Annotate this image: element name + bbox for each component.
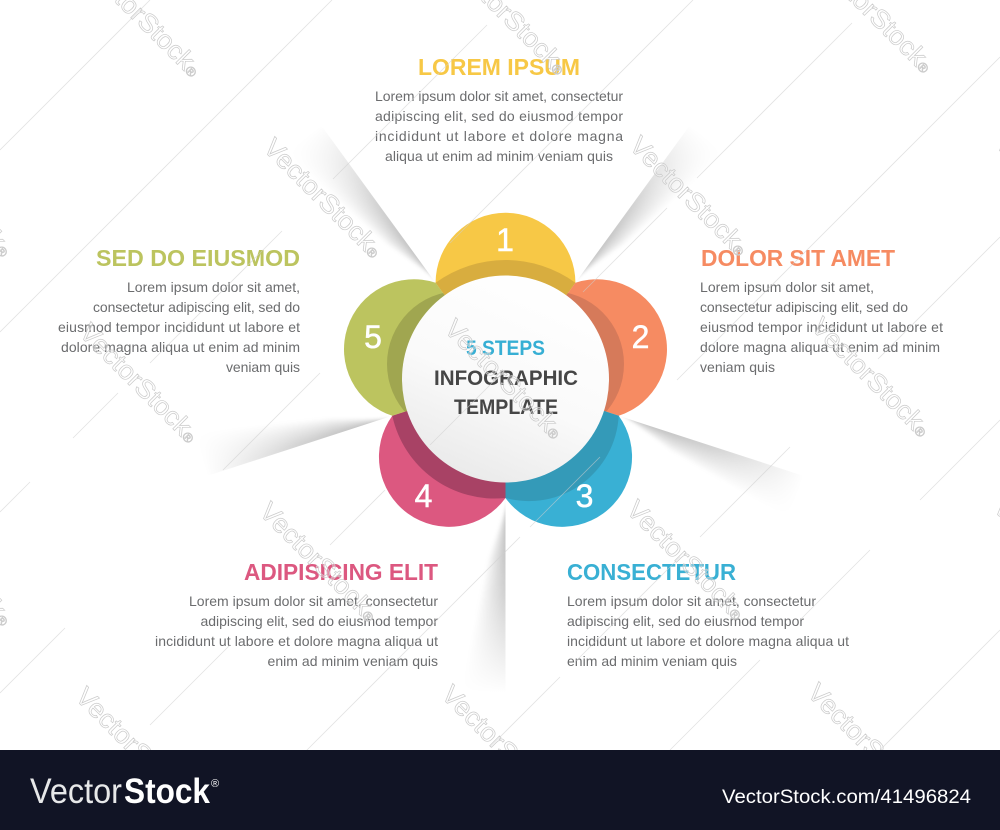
footer logo: Stock: [124, 772, 210, 811]
petal 1: yellow: [436, 213, 575, 379]
body: [155, 593, 438, 669]
heading: LOREM IPSUM: [418, 54, 580, 80]
center title: TEMPLATE: [454, 396, 558, 419]
body: adipiscing elit, sed do eiusmod tempor: [567, 613, 804, 629]
heading: ADIPISICING ELIT: [244, 559, 439, 585]
petal 3: blue: 3: [576, 478, 593, 514]
watermarks: VectorStock®: [806, 311, 938, 443]
body: veniam quis: [226, 359, 300, 375]
watermarks: VectorStock®: [74, 317, 206, 449]
body: eiusmod tempor incididunt ut labore et: [58, 319, 300, 335]
heading: CONSECTETUR: [567, 559, 736, 585]
body: incididunt ut labore et dolore magna: [375, 128, 623, 144]
body: [375, 88, 623, 164]
step 4 text: adipisicing elit: [155, 559, 439, 669]
shadow wedge between steps 3 and 4: [462, 498, 508, 693]
watermarks: VectorStock®: [621, 494, 753, 626]
body: [700, 279, 943, 375]
footer logo: ®: [211, 778, 219, 790]
step 5 text: sed do eiusmod: [58, 245, 300, 375]
petal 2: orange: 2: [632, 319, 649, 355]
petal 4: pink: 4: [415, 478, 432, 514]
center title: 5 STEPS: [466, 337, 545, 360]
body: incididunt ut labore et dolore magna aliqua ut: [155, 633, 438, 649]
flower diagram: [344, 213, 667, 527]
petal 5: green: [344, 279, 445, 416]
body: [58, 279, 300, 375]
footer logo: Vector: [30, 772, 122, 811]
body: Lorem ipsum dolor sit amet, consectetur: [567, 593, 816, 609]
petal 3: blue: [506, 379, 632, 527]
body: Lorem ipsum dolor sit amet, consectetur: [375, 88, 623, 104]
body: consectetur adipiscing elit, sed do: [700, 299, 908, 315]
watermarks: VectorStock®: [436, 679, 568, 811]
body: dolore magna aliqua ut enim ad minim: [61, 339, 300, 355]
center title: INFOGRAPHIC: [434, 367, 578, 390]
body: eiusmod tempor incididunt ut labore et: [700, 319, 943, 335]
petal 1: yellow: 1: [496, 222, 514, 258]
body: enim ad minim veniam quis: [567, 653, 737, 669]
heading: SED DO EIUSMOD: [96, 245, 300, 271]
body: dolore magna aliqua ut enim ad minim: [700, 339, 940, 355]
footer logo: [30, 772, 219, 811]
body: enim ad minim veniam quis: [268, 653, 438, 669]
shadow wedge between steps 2 and 3: [605, 413, 805, 518]
watermarks: VectorStock®: [624, 130, 756, 262]
step 3 text: consectetur: [567, 559, 849, 669]
shadow wedge between steps 1 and 2: [573, 123, 726, 309]
center circle: [402, 276, 609, 482]
body: consectetur adipiscing elit, sed do: [93, 299, 300, 315]
footer banner: [0, 750, 1000, 830]
watermarks: VectorStock®: [258, 132, 390, 264]
body: adipiscing elit, sed do eiusmod tempor: [200, 613, 438, 629]
watermarks: VectorStock®: [70, 681, 202, 813]
body: aliqua ut enim ad minim veniam quis: [385, 148, 613, 164]
petal 5: green: 5: [364, 319, 382, 355]
body: [567, 593, 849, 669]
watermarks: VectorStock®: [802, 677, 934, 809]
shadow wedge between steps 5 and 1: [285, 123, 438, 309]
body: Lorem ipsum dolor sit amet,: [700, 279, 874, 295]
footer image id: VectorStock.com/41496824: [722, 787, 971, 808]
center title: [434, 337, 578, 419]
petal 4: pink: [379, 379, 506, 527]
body: incididunt ut labore et dolore magna aliqua ut: [567, 633, 849, 649]
body: adipiscing elit, sed do eiusmod tempor: [375, 108, 623, 124]
step 2 text: dolor sit amet: [700, 245, 943, 375]
petal 2: orange: [566, 279, 667, 416]
heading: DOLOR SIT AMET: [701, 245, 896, 271]
shadow wedge between steps 4 and 5: [193, 374, 393, 479]
body: Lorem ipsum dolor sit amet, consectetur: [189, 593, 438, 609]
body: Lorem ipsum dolor sit amet,: [127, 279, 300, 295]
watermarks: VectorStock®: [254, 496, 386, 628]
body: veniam quis: [700, 359, 775, 375]
watermarks: VectorStock®: [439, 313, 571, 445]
step 1 text: lorem ipsum: [375, 54, 623, 164]
